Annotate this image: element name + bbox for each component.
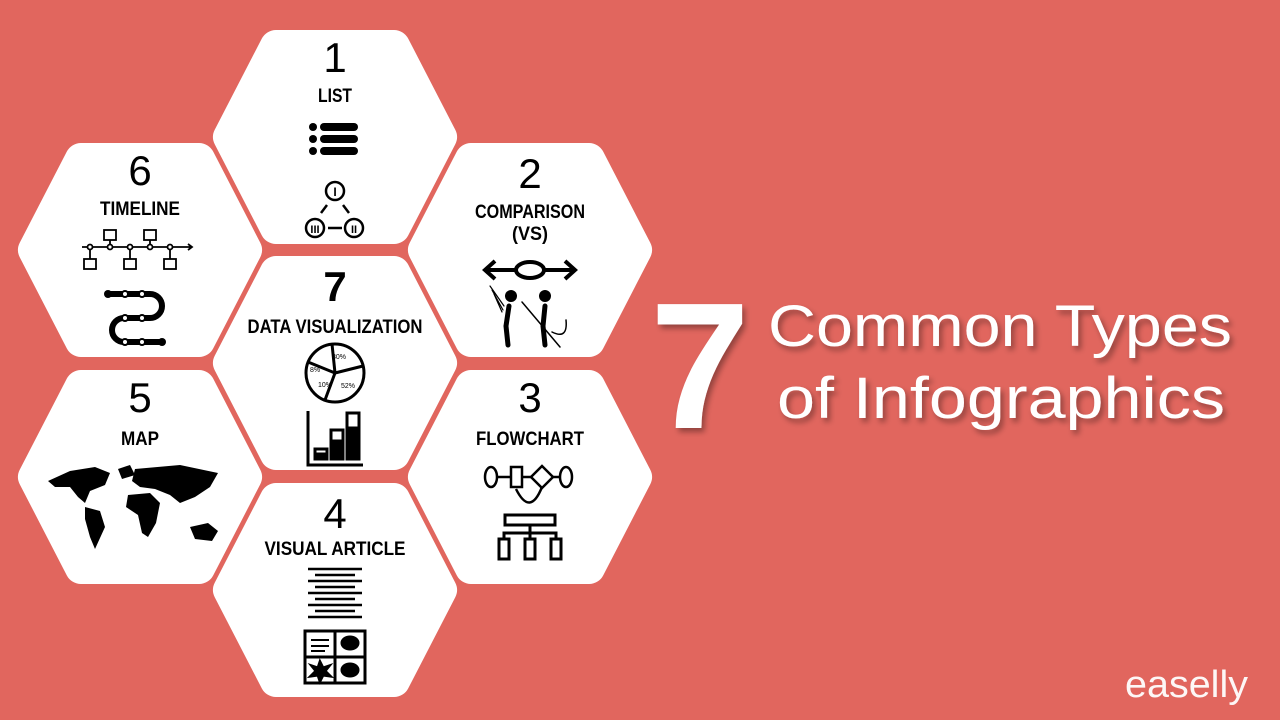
- title: Common Types of Infographics: of Infographics: [777, 366, 1225, 431]
- icon: flow: [485, 466, 572, 503]
- icon: org chart: [499, 515, 561, 559]
- icon: bar chart: [308, 411, 363, 465]
- panel: 5 map: 5: [128, 374, 152, 421]
- icon: cycle: II: [351, 224, 357, 236]
- panel: 1 list: LIST: [318, 86, 352, 107]
- panel: 7 data visualization: 7: [323, 263, 347, 310]
- panel: 4 visual article: VISUAL ARTICLE: [264, 539, 406, 560]
- panel: 4 visual article: 4: [323, 490, 347, 537]
- panel: 3 flowchart: [424, 374, 636, 568]
- title: Common Types of Infographics: [768, 294, 1232, 431]
- icon: world map: [48, 465, 218, 549]
- icon: pie chart: 8%: [310, 367, 320, 374]
- panel: 2 comparison: [424, 150, 636, 347]
- icon: list: [309, 123, 358, 155]
- icon: winding road: [104, 290, 166, 346]
- icon: pie chart: 30%: [332, 354, 346, 361]
- icon: panel grid: [305, 631, 365, 683]
- panel: 5 map: MAP: [121, 429, 159, 450]
- panel: 1 list: [229, 34, 441, 237]
- icon: text lines: [308, 569, 362, 617]
- panel: 7 data visualization: [229, 263, 441, 465]
- icon: cycle: I: [333, 185, 337, 199]
- panel: 7 data visualization: DATA VISUALIZATION: [248, 317, 422, 338]
- icon: timeline: [82, 230, 192, 269]
- panel: 2 comparison: 2: [518, 150, 542, 197]
- icon: cycle: III: [310, 224, 320, 236]
- panel: 3 flowchart: FLOWCHART: [476, 429, 584, 450]
- icon: cycle: [306, 182, 363, 237]
- panel: 3 flowchart: 3: [518, 374, 542, 421]
- panel: 6 timeline: [34, 147, 246, 346]
- panel: 6 timeline: 6: [128, 147, 152, 194]
- panel: 2 comparison: (VS): [512, 224, 548, 245]
- logo: easelly: easelly: [1125, 664, 1248, 706]
- title: Common Types of Infographics: Common Types: [768, 294, 1232, 359]
- icon: vs arrow: [485, 261, 575, 279]
- icon: pie chart: [306, 344, 364, 402]
- icon: pie chart: 52%: [341, 383, 355, 390]
- panel: 4 visual article: [229, 490, 441, 683]
- panel: 1 list: 1: [323, 34, 347, 81]
- icon: angel and devil: [490, 286, 566, 347]
- panel: 6 timeline: TIMELINE: [100, 199, 180, 220]
- title: big 7: 7: [650, 266, 750, 467]
- icon: pie chart: 10%: [318, 382, 332, 389]
- panel: 5 map: [34, 374, 246, 568]
- panel: 2 comparison: COMPARISON: [475, 202, 585, 223]
